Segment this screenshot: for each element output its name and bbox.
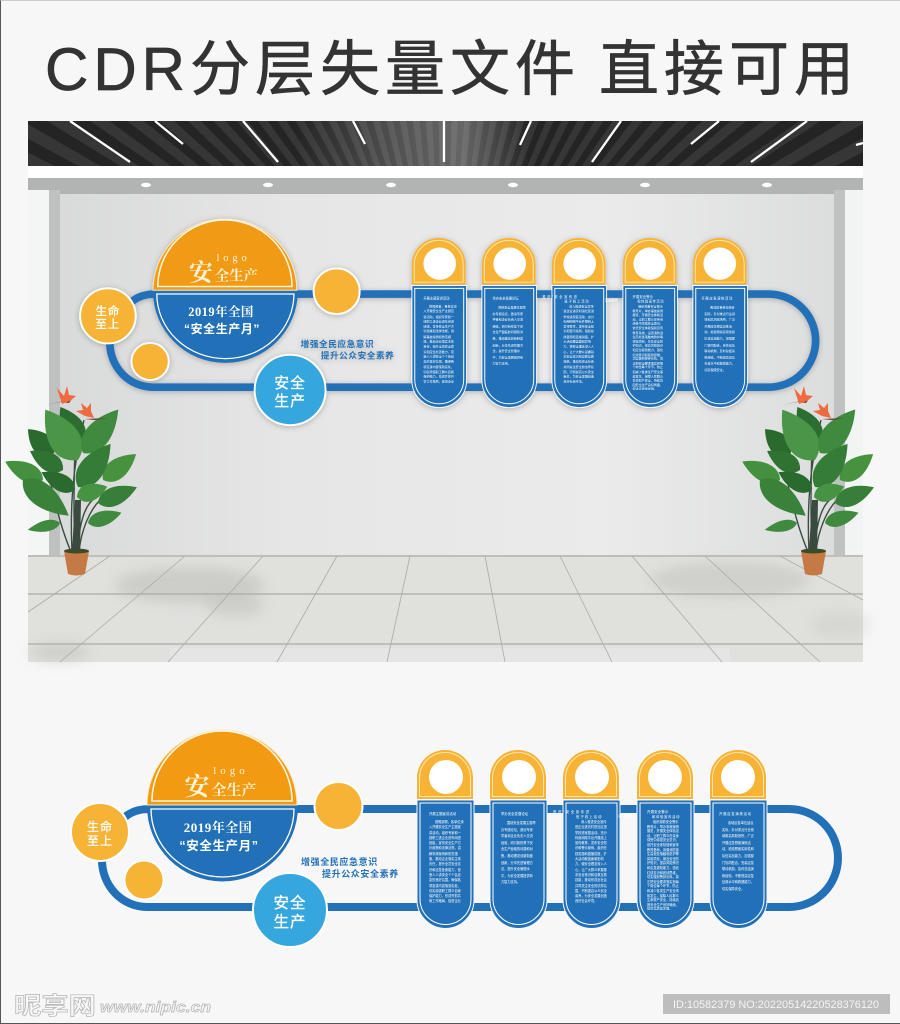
right plant (738, 386, 879, 576)
panel 3: 班子线上活动 (564, 299, 590, 304)
small orange circle (131, 343, 169, 380)
panel 2: 围绕安全发展主题举办专题论坛，邀请专家学者和企业负责人交流经验，研讨新形势下安全生产面临的问题和对策，推动理念创新制度创新，分享先进管理方法，提升安全管理水平，为安全发展提供有力智力支持。 (501, 821, 536, 884)
slogan: 增强全民应急意识 (301, 338, 374, 349)
panel 3: 班子线上活动 (576, 814, 602, 819)
watermark (14, 993, 211, 1020)
watermark: 昵享网 (14, 993, 96, 1020)
circle: life first (71, 803, 129, 861)
panel 2: 举办安全发展论坛 (501, 811, 529, 816)
floor (28, 555, 870, 662)
panel 2 (482, 238, 537, 408)
panel 5 (710, 750, 767, 929)
title: 直接可用 (599, 36, 859, 103)
half circle heading (153, 291, 298, 363)
panel 5: 各地区各单位结合实际，针对重点行业领域和高风险场所，广泛开展应急预案演练活动，检验预案实用性和队伍实战能力，加强部门协同配合，完善应急联动机制，及时总结演练经验，不断提高应急处置水平和救援能力，切实保障安全。 (722, 821, 754, 891)
watermark: www.nipic.cn (100, 999, 211, 1016)
panel 4: 组织观看安全警示教育片，举办事故案例展览，开展安全体验活动，让职工群众在亲身感受中增强安全意识，依托安全体验馆和宣传教育基地，设置消防逃生高处坠落触电防护等体验项目，普及安全防护知识，提高风险辨识和应急避险能力，强化红线意识和底线思维，切实做到警钟长鸣，真正把安全要求落实到每个岗位每个环节，防止和减少各类生产安全事故发生，保障人民群众生命财产安全，持续巩固安全生产良好局面，促进高质量发展。 (647, 820, 679, 910)
half circle logo: 全生产 (215, 267, 258, 285)
ceiling lights (70, 121, 863, 162)
slogan: 提升公众安全素养 (321, 350, 394, 361)
panel 5 (693, 238, 748, 408)
panel 1 (417, 750, 474, 928)
image id box: ID:10582379 NO:20220514220528376120 (673, 999, 879, 1011)
flat design (71, 730, 838, 947)
half circle logo: 安 (184, 773, 211, 801)
panel 3: 深入推进安全宣传进企业进农村进社区进学校进家庭活动，充分利用网络平台开展线上宣传教育，发布安全知识和警示案例，组织在线答题和直播讲座，扩大活动覆盖面和影响力，使安全理念深入人心，让广大群众掌握基本安全常识和自救互救技能，推动形成全社会共同关注安全的浓厚氛围，不断提高公众安全素养，为安全发展创造良好社会环境。 (563, 305, 594, 384)
title: CDR分层失量文件 (45, 36, 580, 103)
small orange circle (124, 860, 164, 900)
circle: safety production: 安全 (274, 374, 306, 392)
half circle logo: 全生产 (211, 781, 257, 799)
panel 4 (637, 750, 694, 929)
circle: life first: 至上 (87, 834, 113, 848)
left plant (1, 386, 142, 576)
slogan: 提升公众安全素养 (322, 868, 399, 879)
panel 4: 和体验宣传活动 (637, 299, 664, 304)
wall mounted design (80, 219, 816, 425)
half circle logo: logo (213, 765, 249, 777)
slogan (301, 338, 394, 361)
half circle heading (147, 806, 298, 882)
half circle heading: “安全生产月” (184, 322, 260, 336)
panel 3: 活动宣传 (605, 298, 618, 303)
panel 3 (542, 238, 618, 408)
ceiling slats (28, 121, 863, 167)
circle: life first: 生命 (95, 304, 120, 318)
ceiling edge band (28, 166, 863, 195)
panel 4: 开展安全警示 (632, 294, 654, 299)
panel 1 (412, 238, 467, 408)
panel 4 (623, 238, 678, 408)
panel 3: 活动宣传 (618, 813, 632, 818)
slogan (301, 856, 399, 879)
circle: safety production: 安全 (273, 894, 307, 912)
title (45, 36, 859, 103)
wall (28, 190, 863, 556)
half circle heading: 2019年全国 (188, 304, 254, 319)
circle: life first: 生命 (87, 819, 113, 834)
track line (102, 809, 838, 907)
image id box (663, 994, 890, 1014)
panel 3 (553, 750, 632, 929)
half circle logo (147, 730, 297, 805)
circle: safety production (255, 355, 326, 425)
circle: life first: 至上 (95, 318, 120, 331)
slogan: 增强全民应急意识 (301, 856, 378, 867)
circle: safety production: 生产 (274, 393, 306, 410)
circle: safety production: 生产 (273, 913, 307, 931)
half circle heading: 2019年全国 (184, 820, 252, 835)
large orange circle (314, 268, 360, 314)
circle: life first (80, 288, 136, 343)
panel 5: 各地区各单位结合实际，针对重点行业领域和高风险场所，广泛开展应急预案演练活动，检验预案实用性和队伍实战能力，加强部门协同配合，完善应急联动机制，及时总结演练经验，不断提高应急处置水平和救援能力，切实保障安全。 (704, 305, 735, 372)
panel 2: 围绕安全发展主题举办专题论坛，邀请专家学者和企业负责人交流经验，研讨新形势下安全生产面临的问题和对策，推动理念创新制度创新，分享先进管理方法，提升安全管理水平，为安全发展提供有力智力支持。 (492, 305, 526, 366)
half circle logo: logo (216, 253, 251, 264)
panel 5: 开展应急演练活动 (702, 296, 733, 301)
panel 2 (490, 750, 547, 929)
panel 4: 组织观看安全警示教育片，举办事故案例展览，开展安全体验活动，让职工群众在亲身感受中增强安全意识，依托安全体验馆和宣传教育基地，设置消防逃生高处坠落触电防护等体验项目，普及安全防护知识，提高风险辨识和应急避险能力，强化红线意识和底线思维，切实做到警钟长鸣，真正把安全要求落实到每个岗位每个环节，防止和减少各类生产安全事故发生，保障人民群众生命财产安全，持续巩固安全生产良好局面，促进高质量发展。 (632, 305, 663, 390)
panel 1: 开展主题宣讲活动 (423, 296, 450, 301)
panel 3: 深入推进安全宣传进企业进农村进社区进学校进家庭活动，充分利用网络平台开展线上宣传教育，发布安全知识和警示案例，组织在线答题和直播讲座，扩大活动覆盖面和影响力，使安全理念深入人心，让广大群众掌握基本安全常识和自救互救技能，推动形成全社会共同关注安全的浓厚氛围，不断提高公众安全素养，为安全发展创造良好社会环境。 (575, 820, 607, 903)
track line (110, 294, 816, 387)
large orange circle (314, 782, 362, 830)
panel 3: 推进“安全宣传进 (542, 294, 578, 299)
half circle logo (153, 219, 297, 290)
panel 2: 举办安全发展论坛 (492, 296, 519, 301)
panel 3: 推进“安全宣传进 (553, 809, 591, 814)
half circle logo: 安 (189, 260, 214, 287)
panel 4: 和体验宣传活动 (652, 814, 680, 819)
panel 4: 开展安全警示 (647, 809, 669, 814)
half circle heading: “安全生产月” (179, 838, 259, 853)
circle: safety production (253, 873, 327, 947)
panel 1: 开展主题宣讲活动 (429, 811, 457, 816)
panel 5: 开展应急演练活动 (719, 811, 752, 816)
